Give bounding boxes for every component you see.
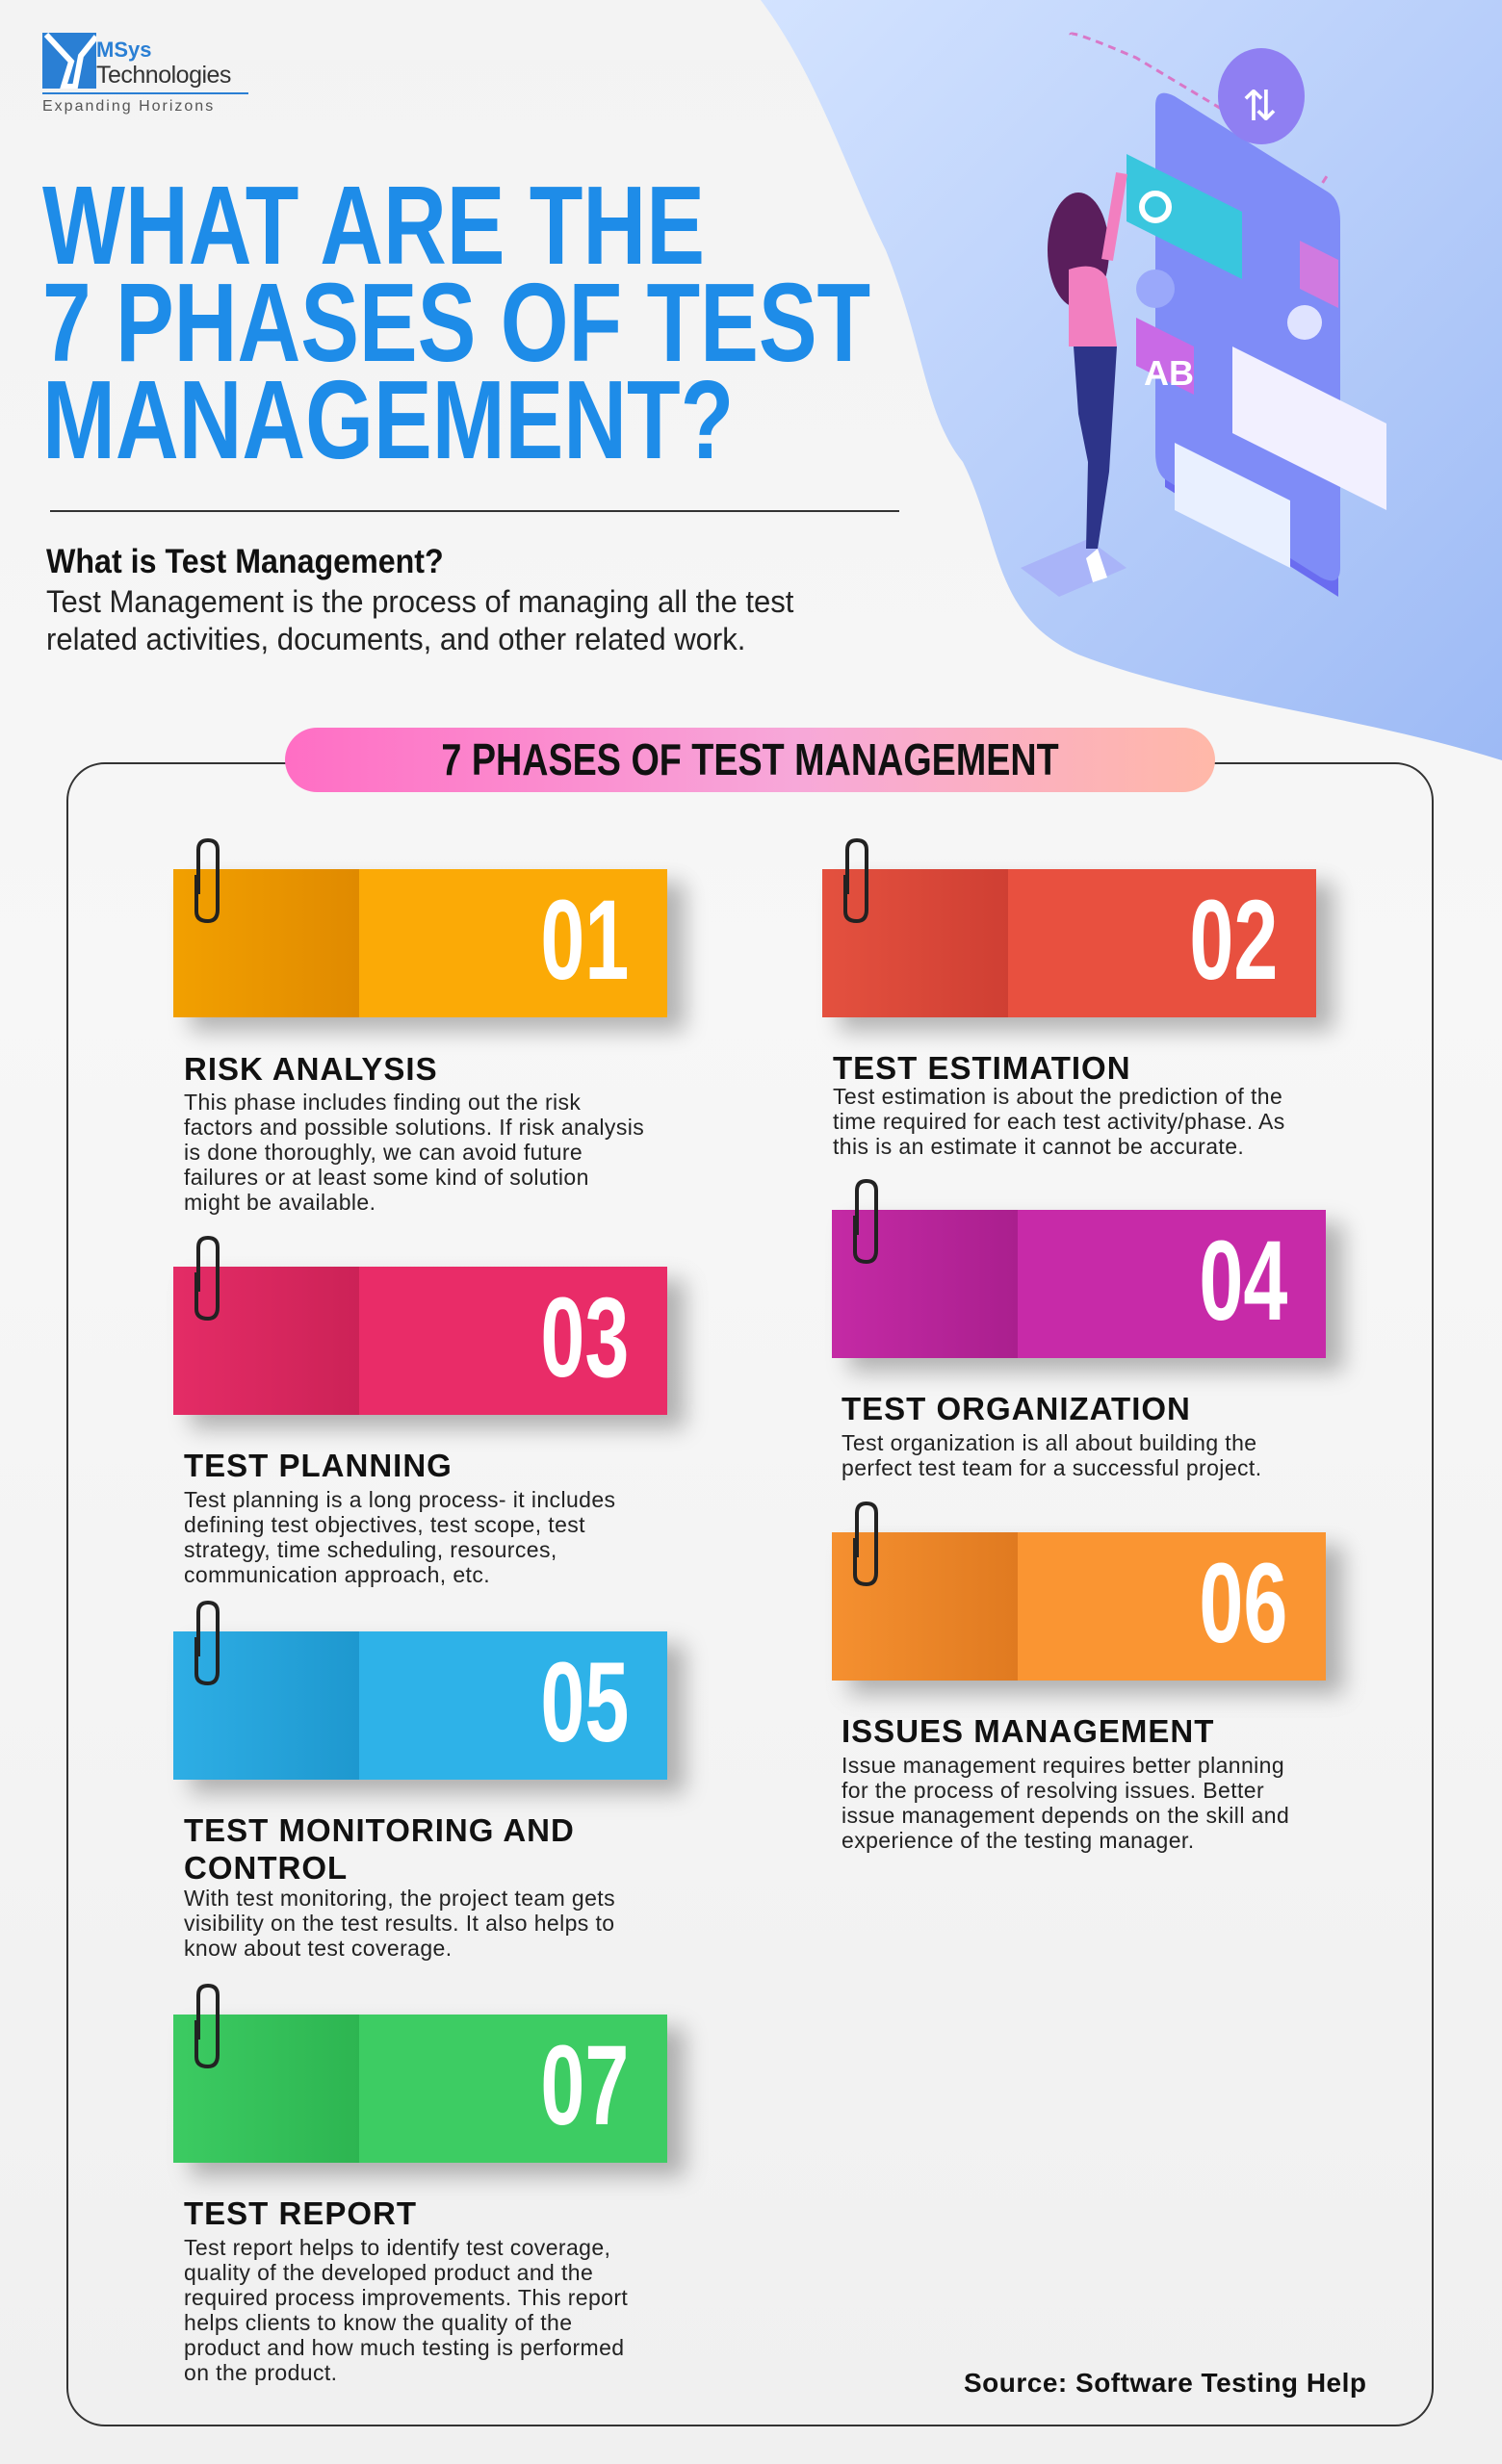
text 02: time required for each test activity/phase. As	[833, 1109, 1285, 1134]
card 04	[832, 1210, 1326, 1358]
title 03: TEST PLANNING	[184, 1448, 453, 1483]
text 04: perfect test team for a successful project.	[842, 1455, 1261, 1480]
text 01: failures or at least some kind of solution	[184, 1165, 589, 1190]
title	[42, 163, 870, 482]
illustration: AB	[1144, 353, 1194, 393]
phase 02	[822, 838, 1346, 1159]
main panel	[66, 762, 1434, 2426]
title 06: ISSUES MANAGEMENT	[842, 1713, 1214, 1749]
intro text: What is Test Management?	[46, 543, 444, 580]
text 04	[842, 1430, 1261, 1480]
title 05: TEST MONITORING AND	[184, 1812, 575, 1848]
illustration: ⇅	[1242, 83, 1278, 130]
text 07: required process improvements. This report	[184, 2285, 628, 2310]
text 06: for the process of resolving issues. Better	[842, 1778, 1264, 1803]
card 01	[173, 869, 667, 1017]
text 01: might be available.	[184, 1190, 376, 1215]
title 02: TEST ESTIMATION	[833, 1050, 1131, 1086]
logo: Expanding Horizons	[42, 98, 215, 115]
card 01: 01	[540, 877, 629, 1004]
text 03: strategy, time scheduling, resources,	[184, 1537, 557, 1562]
text 02	[833, 1084, 1285, 1159]
text 07: on the product.	[184, 2360, 337, 2385]
text 07: quality of the developed product and the	[184, 2260, 593, 2285]
phase 05	[173, 1601, 697, 1961]
text 02: Test estimation is about the prediction of the	[833, 1084, 1282, 1109]
card 02: 02	[1189, 877, 1278, 1004]
title 05	[184, 1812, 575, 1886]
phase 06	[832, 1502, 1356, 1853]
background blob	[761, 0, 1502, 760]
phase 01	[173, 838, 697, 1215]
text 05: visibility on the test results. It also helps to	[184, 1911, 614, 1936]
card 07	[173, 2015, 667, 2163]
card 05	[173, 1631, 667, 1780]
text 07: Test report helps to identify test coverage,	[184, 2235, 610, 2260]
intro text: related activities, documents, and other related work.	[46, 622, 745, 656]
source: Source: Software Testing Help	[964, 2368, 1367, 2398]
phase 04	[832, 1179, 1356, 1480]
card 02	[822, 869, 1316, 1017]
phase 07	[173, 1984, 697, 2385]
text 06	[842, 1753, 1289, 1853]
card 04: 04	[1199, 1218, 1287, 1345]
title 07: TEST REPORT	[184, 2195, 417, 2231]
section heading pill: 7 PHASES OF TEST MANAGEMENT	[441, 734, 1059, 784]
card 06: 06	[1199, 1540, 1287, 1667]
phase 03	[173, 1236, 697, 1587]
title: WHAT ARE THE	[42, 163, 705, 288]
text 07	[184, 2235, 628, 2385]
text 05: know about test coverage.	[184, 1936, 453, 1961]
text 01: factors and possible solutions. If risk analysis	[184, 1115, 644, 1140]
text 01: is done thoroughly, we can avoid future	[184, 1140, 583, 1165]
card 06	[832, 1532, 1326, 1681]
card 03: 03	[540, 1274, 629, 1401]
title 05: CONTROL	[184, 1850, 348, 1886]
text 05: With test monitoring, the project team gets	[184, 1886, 615, 1911]
text 01	[184, 1090, 644, 1215]
text 02: this is an estimate it cannot be accurate.	[833, 1134, 1244, 1159]
logo: MSys	[96, 38, 151, 62]
text 03: Test planning is a long process- it includes	[184, 1487, 615, 1512]
title 01: RISK ANALYSIS	[184, 1051, 438, 1087]
card 07: 07	[540, 2022, 629, 2149]
card 03	[173, 1267, 667, 1415]
text 03: communication approach, etc.	[184, 1562, 490, 1587]
title 04: TEST ORGANIZATION	[842, 1391, 1191, 1426]
text 03: defining test objectives, test scope, test	[184, 1512, 585, 1537]
text 03	[184, 1487, 615, 1587]
intro text: Test Management is the process of managing all the test	[46, 584, 793, 619]
logo: Technologies	[96, 62, 231, 89]
text 06: issue management depends on the skill and	[842, 1803, 1289, 1828]
title: 7 PHASES OF TEST	[42, 260, 870, 385]
text 04: Test organization is all about building the	[842, 1430, 1256, 1455]
title: MANAGEMENT?	[42, 357, 734, 482]
logo	[42, 33, 248, 115]
illustration	[1021, 33, 1386, 597]
card 05: 05	[540, 1639, 629, 1766]
text 05	[184, 1886, 615, 1961]
text 07: product and how much testing is performed	[184, 2335, 624, 2360]
text 01: This phase includes finding out the risk	[184, 1090, 581, 1115]
text 06: Issue management requires better planning	[842, 1753, 1284, 1778]
section heading pill	[285, 728, 1215, 792]
text 07: helps clients to know the quality of the	[184, 2310, 572, 2335]
text 06: experience of the testing manager.	[842, 1828, 1194, 1853]
intro text	[46, 543, 793, 656]
